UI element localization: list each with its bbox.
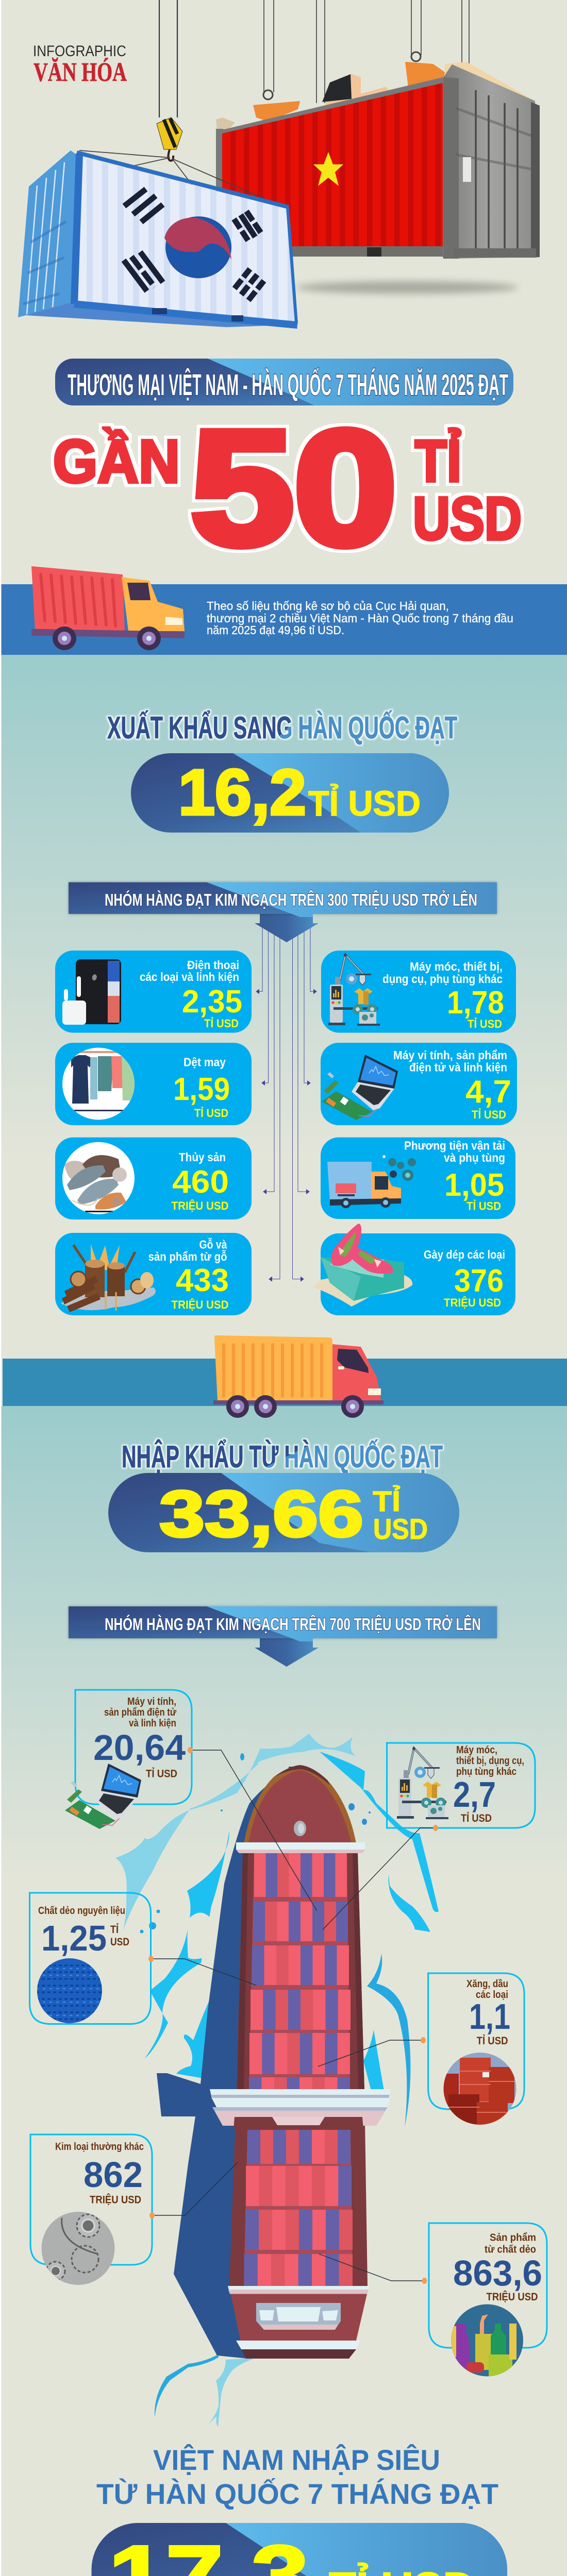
icon: shoes on a box [313,1224,412,1307]
heading: trade deficit [96,2444,498,2510]
icon: Vietnam flag star [313,152,343,186]
pill: export value 16,2: 16,2 [178,757,306,828]
callout: fuels: TỈ USD [477,2035,508,2047]
callout: computers and electronics [65,1690,192,1829]
logo: Infographic Văn Hóa: VĂN HÓA [34,57,127,87]
callout: computers and electronics: sản phẩm điện tử [104,1707,176,1718]
pill: import value 33,66: TỈ [373,1485,401,1517]
callout: plastic products [429,2223,547,2376]
headline: gần 50 tỉ USD: 50 [191,397,397,579]
callout: raw plastics [30,1893,151,2024]
card: wood products: 433 [176,1263,229,1298]
card: seafood: 460 [172,1164,229,1200]
callout: machinery import: phụ tùng khác [456,1766,516,1777]
callout: computers and electronics: TỈ USD [146,1768,177,1780]
icon: orange truck [213,1335,383,1418]
logo: Infographic Văn Hóa [33,43,127,87]
image: metal gears [41,2212,114,2285]
card: wood products: Gỗ và [199,1238,227,1251]
headline: gần 50 tỉ USD: USD [413,485,522,553]
title pill [55,359,513,405]
icon: red truck [31,566,185,650]
card: wood products: TRIỆU USD [171,1298,229,1311]
callout: machinery import: 2,7 [453,1774,496,1815]
card: phones: các loại và linh kiện [140,970,239,984]
heading: trade deficit: VIỆT NAM NHẬP SIÊU [153,2444,440,2476]
intro text: thương mại 2 chiều Việt Nam - Hàn Quốc trong 7 tháng đầu [207,612,513,625]
icon: logs [61,1244,156,1312]
pill: deficit value 17,3 [92,2523,507,2576]
container rows [244,1853,353,2286]
card: seafood: Thủy sản [179,1150,226,1164]
callout: plastic products: 863,6 [453,2253,542,2293]
banner: import groups [69,1606,497,1667]
intro text [207,599,513,637]
callout: other base metals: Kim loại thường khác [55,2141,144,2153]
connector lines: export groups [256,923,316,1281]
intro text: Theo số liệu thống kê sơ bộ của Cục Hải quan, [207,599,449,613]
callout: computers and electronics: và linh kiện [129,1718,176,1729]
pill: export value 16,2 [131,753,449,833]
leader dots [148,1747,438,2284]
card: vehicles: TỈ USD [466,1200,501,1213]
card: footwear: TRIỆU USD [444,1296,501,1309]
callout: fuels [428,1973,524,2125]
heading: trade deficit: TỪ HÀN QUỐC 7 THÁNG ĐẠT [96,2478,498,2510]
callout: fuels: Xăng, dầu [466,1978,508,1990]
callout: fuels: 1,1 [469,1996,510,2037]
icon: phone and earbuds [62,959,121,1025]
callout: raw plastics: USD [110,1936,129,1948]
icon: seafood [62,1142,135,1214]
card: electronics [321,1043,517,1125]
banner: export groups [69,882,497,942]
shadow under container [296,281,518,294]
card: vehicles: và phụ tùng [444,1151,505,1164]
ship shadow [157,1767,300,2359]
card: vehicles: 1,05 [444,1167,504,1203]
icon: robot arm [328,954,380,1026]
card: phones: 2,35 [182,984,242,1020]
headline: gần 50 tỉ USD [53,397,522,579]
icon: laptop and circuit board [322,1055,398,1120]
pill: import value 33,66: USD [373,1513,428,1545]
card: machinery: TỈ USD [468,1018,502,1030]
callout: other base metals: TRIỆU USD [90,2194,141,2206]
card: seafood: TRIỆU USD [171,1199,229,1212]
card: footwear: Gày dép các loại [424,1248,505,1261]
illustration: Korea flag container [18,0,297,327]
image: plastic bottles [451,2304,523,2376]
card: textiles: Dệt may [184,1056,226,1069]
icon: robot arm [397,1747,448,1819]
leader lines [151,1750,436,2281]
callout: plastic products: TRIỆU USD [487,2291,538,2303]
headline: gần 50 tỉ USD: GẦN [53,427,180,496]
callout: other base metals: 862 [84,2155,143,2195]
icon: trigrams [124,189,264,300]
card: wood products: sản phẩm từ gỗ [148,1249,227,1263]
water splash around ship [115,1734,439,2427]
card: wood products [55,1233,252,1315]
card: textiles: TỈ USD [194,1107,228,1120]
callout: machinery import: TỈ USD [461,1812,492,1824]
logo: Infographic Văn Hóa: INFOGRAPHIC [33,43,126,60]
transition band [3,1359,567,1406]
card: textiles: 1,59 [173,1072,230,1107]
pill: import value 33,66: 33,66 [159,1477,363,1550]
card: machinery: 1,78 [447,985,504,1021]
callout: plastic products: Sản phẩm [490,2232,536,2243]
card: footwear: 376 [454,1263,504,1299]
callout: machinery import [387,1743,535,1828]
pill: export value 16,2: TỈ USD [308,784,421,823]
icon: clothes on a rail [62,1048,135,1120]
card: machinery: Máy móc, thiết bị, [410,960,503,973]
illustration: Vietnam flag container hanging from crane [216,0,540,259]
intro text: năm 2025 đạt 49,96 tỉ USD. [207,623,344,637]
callout: computers and electronics: Máy vi tính, [127,1696,176,1707]
card: phones: Điện thoại [187,958,239,972]
card: electronics: Máy vi tính, sản phẩm [393,1048,507,1062]
card: phones: TỈ USD [204,1017,239,1030]
image: blue plastic pellets [36,1958,103,2023]
callout: machinery import: thiết bị, dụng cụ, [456,1755,524,1767]
card: vehicles: Phương tiện vận tải [404,1139,505,1153]
cargo ship [210,1765,391,2359]
icon: laptop [65,1764,141,1829]
card: electronics: TỈ USD [472,1108,506,1121]
card: footwear [313,1224,515,1315]
card: vehicles [321,1138,515,1219]
callout: fuels: các loại [476,1989,508,2001]
card: phones [55,951,252,1032]
pill: import value 33,66 [108,1473,459,1552]
card: machinery: dụng cụ, phụ tùng khác [382,972,503,986]
card: seafood [55,1138,252,1219]
headline: gần 50 tỉ USD: TỈ [415,429,461,494]
callout: computers and electronics: 20,64 [93,1727,186,1768]
callout: raw plastics: Chất dẻo nguyên liệu [38,1905,125,1917]
image: red oil barrels [443,2053,516,2125]
card: textiles [55,1043,252,1125]
icon: delivery truck with gears [327,1155,416,1208]
callout: other base metals [30,2134,152,2285]
card: machinery [321,951,516,1032]
callout: plastic products: từ chất dẻo [485,2244,536,2256]
icon: taegeuk circle [164,216,231,278]
card: electronics: điện tử và linh kiện [409,1060,507,1074]
callout: machinery import: Máy móc, [456,1744,497,1756]
callout: raw plastics: TỈ [110,1924,119,1936]
callout: raw plastics: 1,25 [41,1918,107,1958]
card: electronics: 4,7 [465,1074,511,1110]
intro band [0,584,567,655]
